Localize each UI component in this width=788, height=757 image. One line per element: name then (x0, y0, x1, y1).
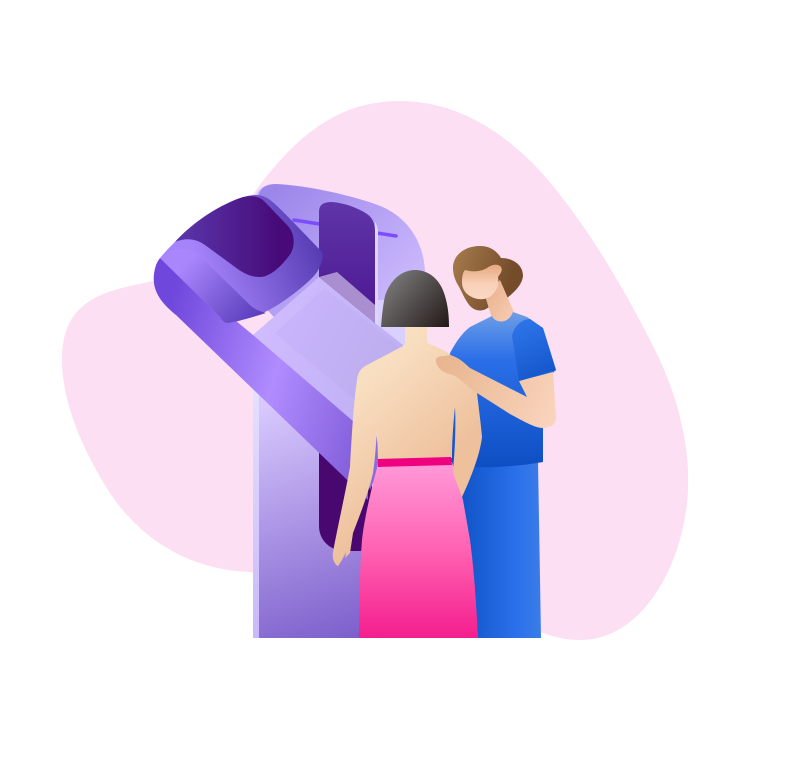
patient torso and arms (333, 322, 482, 566)
head outer (160, 195, 323, 323)
light strip by panel (375, 222, 378, 345)
compression plate (253, 277, 403, 440)
pink background blob (62, 101, 688, 640)
compression head (160, 195, 323, 323)
machine column (253, 380, 369, 638)
nurse arm (436, 319, 556, 428)
nurse forearm and hand (436, 355, 556, 428)
dark upper panel (319, 202, 375, 330)
nurse face (462, 265, 502, 299)
dark lower panel (319, 430, 372, 551)
nurse shirt (445, 312, 556, 470)
machine upper head (255, 184, 425, 345)
machine arm (154, 258, 368, 500)
patient skirt (359, 462, 478, 638)
nurse body (445, 246, 556, 638)
head lower lobe (160, 249, 266, 323)
machine (154, 184, 425, 638)
gap behind patient arm (368, 430, 380, 490)
purple rod (294, 220, 396, 236)
patient hair (381, 270, 449, 327)
patient belt (378, 457, 452, 467)
nurse neck (485, 280, 514, 325)
compression plate shadow (319, 272, 375, 323)
nurse hair (453, 246, 523, 310)
nurse trousers (458, 460, 541, 638)
nurse sleeve (512, 319, 556, 381)
patient (333, 270, 482, 638)
head dark top (175, 196, 294, 277)
